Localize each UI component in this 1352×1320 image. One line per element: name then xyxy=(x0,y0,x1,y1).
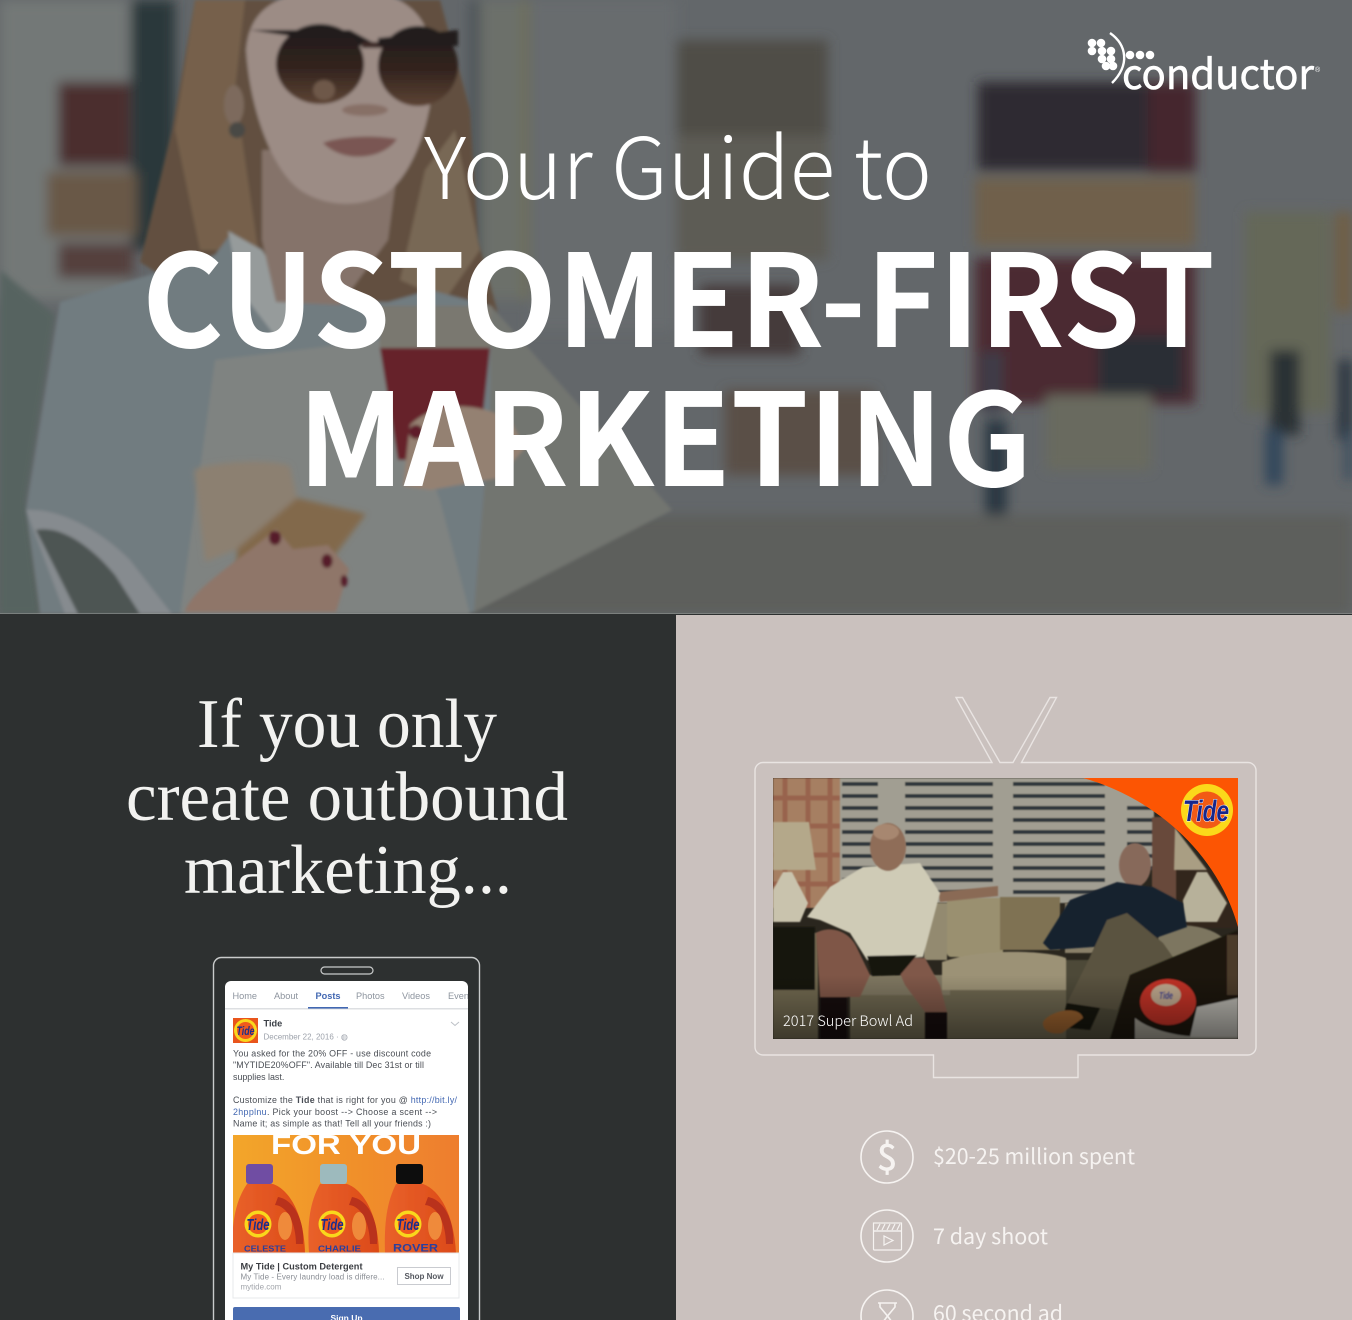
bottle: Rover: Tide xyxy=(396,1217,420,1234)
post copy: 2hpplnu. Pick your boost --> Choose a scent --> xyxy=(233,1107,437,1117)
ad link card: My Tide | Custom Detergent xyxy=(240,1262,362,1272)
shirt right panel xyxy=(474,306,672,612)
bottle: Charlie xyxy=(308,1164,379,1254)
title: Customer-First Marketing: MARKETING xyxy=(298,338,1032,523)
stat: shoot xyxy=(861,1210,1048,1262)
stat: budget xyxy=(861,1129,1135,1183)
tide logo: Tide xyxy=(1183,795,1229,828)
blouse xyxy=(26,236,492,614)
ad link card xyxy=(233,1253,459,1298)
facebook tabs: Photos xyxy=(356,991,385,1001)
title: Customer-First Marketing: CUSTOMER-FIRST xyxy=(142,199,1215,384)
shop now button: Shop Now xyxy=(404,1272,444,1281)
man in navy sweater xyxy=(1043,843,1187,1033)
left sleeve fold xyxy=(26,510,172,614)
bottle: Rover xyxy=(385,1164,456,1254)
tide avatar xyxy=(233,1018,258,1043)
bottle: Celeste xyxy=(232,1164,305,1254)
heading: If you only create outbound marketing: If you only xyxy=(197,686,497,763)
panel: outbound marketing left xyxy=(128,698,568,1320)
tide logo xyxy=(1181,784,1233,836)
hand holding cup xyxy=(403,406,525,490)
stat: budget: $20-25 million spent xyxy=(933,1140,1135,1171)
left companion shoulder xyxy=(0,270,55,614)
bottle: Celeste: Tide xyxy=(246,1217,270,1234)
tide corner swoosh xyxy=(1083,778,1238,927)
shop now button xyxy=(398,1268,450,1284)
caption: 2017 Super Bowl Ad xyxy=(783,1010,913,1031)
tide ad image xyxy=(232,1129,459,1254)
icon: dollar sign xyxy=(861,1129,913,1183)
facebook tabs xyxy=(233,992,468,999)
tv screen: super bowl ad still xyxy=(773,778,1238,1039)
facebook post screenshot xyxy=(225,981,476,1320)
panel: hero photo banner xyxy=(0,0,1352,614)
logo: conductor: ® xyxy=(1315,66,1321,74)
panel: tv ad right xyxy=(676,615,1352,1320)
sunglasses xyxy=(250,24,458,106)
woman xyxy=(26,0,672,614)
icon: dollar sign: $ xyxy=(877,1129,897,1181)
post copy: supplies last. xyxy=(233,1072,284,1082)
post copy: You asked for the 20% OFF - use discount code xyxy=(233,1048,431,1058)
title: Customer-First Marketing xyxy=(142,199,1215,523)
bottle: Rover: ROVER xyxy=(393,1242,438,1254)
heading: If you only create outbound marketing: create outbound xyxy=(126,759,568,836)
tv outline with antenna xyxy=(755,698,1256,1078)
post header: Tide xyxy=(264,1018,282,1028)
facebook tabs: Home xyxy=(232,991,257,1001)
bottle: Charlie: Tide xyxy=(320,1217,344,1234)
post copy xyxy=(233,1048,458,1128)
hair xyxy=(140,0,498,312)
blurred shop background xyxy=(0,0,1352,614)
phone xyxy=(193,462,366,561)
facebook tabs: Posts xyxy=(316,991,341,1001)
tide avatar: Tide xyxy=(236,1024,255,1038)
facebook tabs: About xyxy=(274,991,298,1001)
stat: ad length xyxy=(861,1290,1063,1320)
curtains and shutters xyxy=(773,778,1238,928)
ad link card: mytide.com xyxy=(240,1282,282,1292)
bottle: Celeste: CELESTE xyxy=(244,1244,286,1254)
facebook post screenshot: December 22, 2016 · ◍ xyxy=(264,1032,348,1042)
logo: conductor: conductor xyxy=(1122,41,1314,101)
post copy: Customize the Tide that is right for you @ http://bit.ly/ xyxy=(233,1095,458,1105)
heading: If you only create outbound marketing xyxy=(126,686,568,909)
hand holding phone xyxy=(185,529,349,612)
lamps xyxy=(773,822,1227,922)
bottle: Charlie: CHARLIE xyxy=(318,1244,361,1254)
sofa xyxy=(773,897,1228,1039)
bottom shade xyxy=(773,982,1238,1039)
man in white shirt xyxy=(807,823,998,1039)
lips xyxy=(323,137,397,157)
stat: shoot: 7 day shoot xyxy=(933,1220,1048,1251)
heading: If you only create outbound marketing: marketing... xyxy=(184,832,512,909)
icon: hourglass xyxy=(861,1290,913,1320)
coffee cup lid xyxy=(378,306,492,348)
nose shadow xyxy=(342,104,388,116)
dark floor and detergent tub: Tide xyxy=(1159,991,1173,1002)
post copy: Name it; as simple as that! Tell all your friends :) xyxy=(233,1118,431,1128)
title: Your Guide to: Your Guide to xyxy=(424,101,932,224)
neck and face xyxy=(262,150,400,305)
tide ad image: FOR YOU xyxy=(271,1129,421,1160)
sign up button xyxy=(233,1307,460,1320)
phone outline xyxy=(214,958,480,1320)
earring xyxy=(229,122,245,138)
coffee cup xyxy=(380,348,490,460)
dark floor and detergent tub xyxy=(1110,930,1238,1039)
facebook tabs: Videos xyxy=(402,991,430,1001)
ad link card: My Tide - Every laundry load is differe... xyxy=(240,1272,384,1282)
icon: clapperboard xyxy=(861,1210,913,1262)
facebook tabs: Events xyxy=(448,991,476,1001)
post copy: "MYTIDE20%OFF". Available till Dec 31st or till xyxy=(233,1060,424,1070)
